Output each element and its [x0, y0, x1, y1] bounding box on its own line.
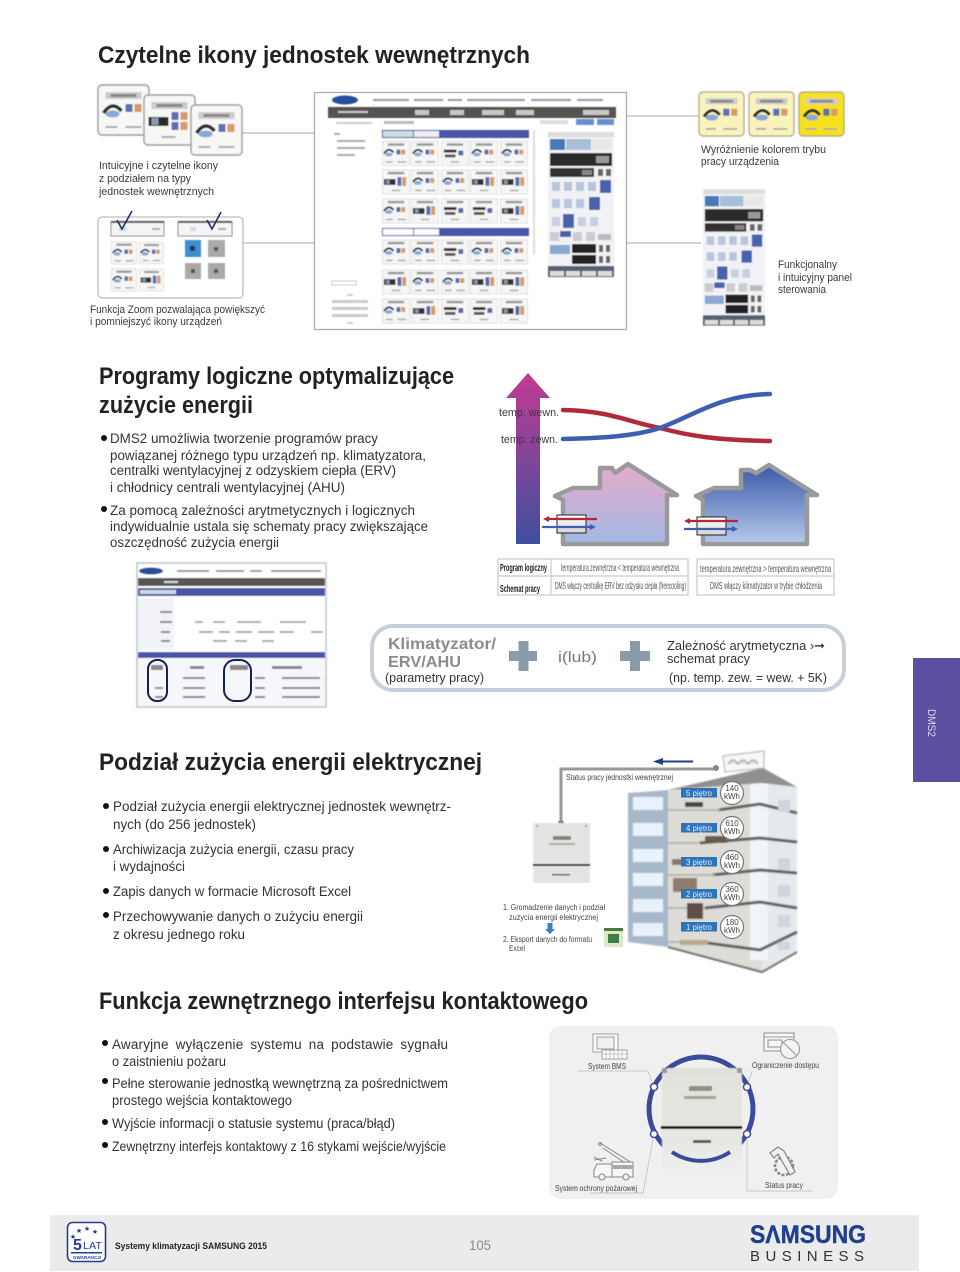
icon: tools: [770, 1147, 795, 1175]
label: fire system: System ochrony pożarowej: [555, 1184, 637, 1193]
text block: logical programs bullets: [101, 431, 428, 550]
side tab: DMS2: [913, 658, 960, 782]
page number: 105: [469, 1237, 491, 1253]
text block: interface bullets: o zaistnieniu pożaru: [112, 1054, 226, 1069]
kWh circles: kWh: [724, 893, 740, 902]
connector lines: [232, 116, 701, 243]
text block: interface bullets: Pełne sterowanie jednostką wewnętrzną za pośrednictwem: [112, 1076, 448, 1091]
icon: access restriction: [764, 1033, 800, 1058]
device: interface module: [661, 1068, 742, 1173]
kWh circles: 180: [725, 918, 739, 927]
icon: 5 year warranty badge: ★: [92, 1228, 98, 1236]
screenshot: schedule form: [137, 563, 326, 707]
pill: program formula: ERV/AHU: [388, 654, 461, 671]
icon: 5 year warranty badge: LAT: [83, 1241, 102, 1252]
text block: energy bullets: nych (do 256 jednostek): [113, 817, 256, 832]
pill: program formula: i(lub): [558, 649, 597, 666]
table: logical program 2: temperatura zewnętrzna > temperatura wewnętrzna: [700, 564, 831, 575]
label: access: Ograniczenie dostępu: [752, 1061, 819, 1070]
caption: control panel: i intuicyjny panel: [778, 272, 852, 284]
floor labels: 5 piętro: [686, 789, 713, 798]
icon group: three indoor unit icons: [98, 85, 242, 155]
highlight ovals: [148, 660, 251, 701]
table: logical program 1: Program logiczny: [500, 563, 547, 574]
text block: logical programs bullets: i chłodnicy centrali wentylacyjnej (AHU): [110, 480, 345, 495]
panel: main DMS2 screen screenshot: [314, 92, 626, 330]
caption: control panel: sterowania: [778, 284, 827, 296]
pill: program formula: (np. temp. zew. = wew. + 5K): [669, 670, 827, 685]
text block: energy bullets: i wydajności: [113, 859, 185, 874]
floor labels: 4 piętro: [686, 824, 713, 833]
caption: control panel: Funkcjonalny: [778, 259, 837, 271]
icon: 5 year warranty badge: ★: [70, 1233, 76, 1241]
zoom function box: [98, 211, 243, 298]
label: status: Status pracy: [765, 1181, 803, 1190]
icon: house with cooling: [684, 465, 817, 544]
icon: 5 year warranty badge: ★: [84, 1225, 90, 1233]
icon: house with freecooling: [542, 464, 677, 544]
heading: logical programs: [99, 363, 454, 419]
caption: intuitive icons: jednostek wewnętrznych: [98, 186, 214, 198]
text block: energy bullets: Przechowywanie danych o zużyciu energii: [113, 909, 363, 924]
text block: logical programs bullets: Za pomocą zależności arytmetycznych i logicznych: [110, 503, 415, 518]
text block: logical programs bullets: DMS2 umożliwia tworzenie programów pracy: [110, 431, 378, 446]
text block: data steps: 2. Eksport danych do formatu: [503, 935, 592, 944]
floor labels: 3 piętro: [686, 858, 713, 867]
text block: interface bullets: Awaryjne wyłączenie systemu na podstawie sygnału: [112, 1037, 448, 1052]
arrow: data flow: [653, 758, 693, 765]
text block: energy bullets: Podział zużycia energii elektrycznej jednostek wewnętrz-: [113, 799, 451, 814]
icon: plus one: [509, 641, 537, 671]
table: logical program 2: DMS włączy klimatyzator w trybie chłodzenia: [710, 581, 822, 592]
pill: program formula: (parametry pracy): [385, 670, 484, 685]
kWh circles: 460: [725, 853, 739, 862]
chart: temperature curves: [563, 394, 770, 441]
arrow: step down: [545, 923, 555, 934]
label: BMS: System BMS: [588, 1062, 626, 1071]
caption: intuitive icons: [98, 160, 218, 198]
kWh circles: kWh: [724, 792, 740, 801]
labels: temperature: [499, 407, 559, 446]
icon: 5 year warranty badge: GWARANCJI: [73, 1255, 101, 1260]
labels: temperature: temp. wewn.: [499, 407, 559, 419]
caption: zoom function: Funkcja Zoom pozwalająca powiększyć: [90, 304, 265, 316]
caption: zoom function: [90, 304, 265, 328]
text block: energy bullets: z okresu jednego roku: [113, 927, 245, 942]
footer band: [50, 1215, 919, 1271]
text block: interface bullets: Zewnętrzny interfejs kontaktowy z 16 stykami wejście/wyjście: [112, 1139, 446, 1154]
text block: data steps: zużycia energii elektrycznej: [509, 913, 598, 922]
footer text: Systemy klimatyzacji SAMSUNG 2015: [115, 1241, 268, 1252]
pill: program formula: Zależność arytmetyczna ›➞: [667, 638, 825, 653]
connector: status line: [558, 765, 719, 826]
text block: energy bullets: Zapis danych w formacie Microsoft Excel: [113, 884, 351, 899]
icon: BMS computer: [593, 1034, 627, 1059]
text block: logical programs bullets: centralki wentylacyjnej z odzyskiem ciepła (ERV): [110, 463, 396, 478]
ring: [649, 1057, 753, 1161]
heading: logical programs: zużycie energii: [99, 392, 253, 419]
icon: Excel: [604, 928, 623, 947]
heading: logical programs: Programy logiczne optymalizujące: [99, 363, 454, 390]
icon: 5 year warranty badge: 5: [73, 1237, 82, 1254]
caption: intuitive icons: Intuicyjne i czytelne ikony: [99, 160, 218, 172]
icon: 5 year warranty badge: ★: [76, 1227, 82, 1235]
logo: Samsung Business: SΛMSUNG: [750, 1221, 866, 1249]
device: power meter: [533, 823, 590, 883]
caption: colour highlight: Wyróżnienie kolorem trybu: [701, 144, 826, 156]
label: indoor status: Status pracy jednostki wewnętrznej: [566, 773, 673, 782]
labels: temperature: temp. zewn.: [501, 434, 558, 446]
diagram: building floors: [628, 751, 797, 972]
heading: energy division: Podział zużycia energii elektrycznej: [99, 749, 482, 776]
kWh circles: kWh: [724, 827, 740, 836]
panel: external contact interface diagram: [549, 1026, 838, 1199]
text block: logical programs bullets: indywidualnie ustala się schematy pracy zwiększające: [110, 519, 428, 534]
text block: interface bullets: [102, 1037, 448, 1154]
caption: intuitive icons: z podziałem na typy: [99, 173, 191, 185]
icon: 5 year warranty badge: [68, 1222, 106, 1262]
table: logical program 1: [498, 559, 688, 595]
ring lower arc over device: [672, 1152, 730, 1161]
caption: zoom function: i pomniejszyć ikony urządzeń: [90, 316, 222, 328]
text block: interface bullets: Wyjście informacji o statusie systemu (praca/błąd): [112, 1116, 395, 1131]
kWh circles: 140: [725, 784, 739, 793]
control panel enlarged: [703, 189, 765, 326]
text: DMS włączy centralkę ERV bez odzysku ciepła (freecooling): [555, 581, 686, 592]
text block: interface bullets: prostego wejścia kontaktowego: [112, 1093, 292, 1108]
icon: fire truck: [594, 1142, 633, 1180]
icon: plus two: [620, 641, 650, 671]
logo: Samsung Business: [750, 1221, 866, 1265]
caption: colour highlight: [701, 144, 826, 168]
caption: control panel: [778, 259, 852, 296]
kWh circles: 360: [725, 885, 739, 894]
icon: check marks: [117, 211, 221, 229]
floor labels: 1 piętro: [686, 923, 713, 932]
text block: data steps: [503, 903, 605, 953]
floor labels: [681, 788, 717, 932]
leader lines: [578, 1071, 812, 1193]
table: logical program 1: temperatura zewnętrzna < temperatura wewnętrzna: [561, 563, 679, 574]
text block: energy bullets: [103, 799, 451, 942]
pill: program formula: Klimatyzator/: [388, 636, 497, 653]
title: readable icons: Czytelne ikony jednostek wewnętrznych: [98, 42, 530, 69]
icon group: yellow mode tiles: [699, 92, 844, 136]
text block: data steps: Excel: [509, 944, 525, 953]
table: logical program 1: Schemat pracy: [500, 584, 540, 595]
text block: logical programs bullets: powiązanej różnego typu urządzeń np. klimatyzatora,: [110, 448, 426, 463]
kWh circles: [720, 782, 744, 938]
text block: logical programs bullets: oszczędność zużycia energii: [110, 535, 279, 550]
text block: data steps: 1. Gromadzenie danych i podział: [503, 903, 605, 912]
kWh circles: 610: [725, 819, 739, 828]
logo: Samsung Business: BUSINESS: [750, 1248, 864, 1265]
table: logical program 2: [697, 559, 834, 595]
ring nodes: [650, 1084, 750, 1138]
kWh circles: kWh: [724, 861, 740, 870]
arrow: temperature scale: [506, 373, 550, 544]
heading: contact interface: Funkcja zewnętrznego interfejsu kontaktowego: [99, 988, 588, 1015]
side tab: DMS2: DMS2: [925, 709, 937, 737]
floor labels: 2 piętro: [686, 890, 713, 899]
pill: program formula: schemat pracy: [667, 651, 750, 666]
caption: colour highlight: pracy urządzenia: [701, 156, 780, 168]
text block: energy bullets: Archiwizacja zużycia energii, czasu pracy: [113, 842, 354, 857]
pill: program formula: [372, 626, 844, 690]
kWh circles: kWh: [724, 926, 740, 935]
